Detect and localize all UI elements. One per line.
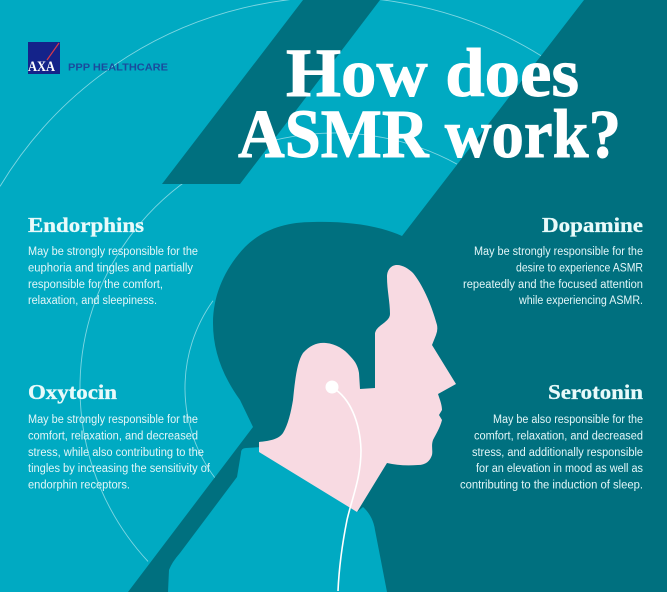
- panel: dopamine: May be strongly responsible for the: [474, 246, 643, 258]
- logo: AXA: [28, 59, 55, 75]
- panel: serotonin: May be also responsible for the: [493, 414, 643, 426]
- title: How does: [286, 35, 579, 111]
- panel: oxytocin: Oxytocin: [28, 380, 117, 404]
- panel: serotonin: for an elevation in mood as well as: [476, 463, 643, 475]
- panel: serotonin: stress, and additionally responsible: [472, 447, 643, 459]
- panel: endorphins: relaxation, and sleepiness.: [28, 295, 157, 307]
- body: [168, 447, 387, 592]
- earphone: [326, 380, 361, 591]
- panel: serotonin: [460, 380, 643, 492]
- panel: oxytocin: stress, while also contributing to the: [28, 447, 204, 459]
- panel: endorphins: euphoria and tingles and partially: [28, 262, 193, 274]
- panel: dopamine: Dopamine: [542, 213, 643, 237]
- logo: [28, 42, 168, 75]
- logo: PPP HEALTHCARE: [68, 62, 168, 74]
- panel: endorphins: responsible for the comfort,: [28, 279, 163, 291]
- panel: endorphins: [28, 213, 198, 307]
- panel: endorphins: Endorphins: [28, 213, 144, 237]
- panel: oxytocin: comfort, relaxation, and decreased: [28, 430, 198, 442]
- panel: dopamine: while experiencing ASMR.: [518, 295, 643, 307]
- panel: dopamine: [463, 213, 643, 307]
- panel: dopamine: repeatedly and the focused attention: [463, 279, 643, 291]
- panel: oxytocin: endorphin receptors.: [28, 480, 130, 492]
- panel: serotonin: Serotonin: [548, 380, 643, 404]
- title: ASMR work?: [238, 96, 621, 172]
- panel: oxytocin: tingles by increasing the sensitivity of: [28, 463, 211, 475]
- panel: serotonin: contributing to the induction of sleep.: [460, 480, 643, 492]
- panel: endorphins: May be strongly responsible for the: [28, 246, 198, 258]
- panel: serotonin: comfort, relaxation, and decreased: [474, 430, 643, 442]
- panel: oxytocin: May be strongly responsible for the: [28, 414, 198, 426]
- face and neck: [259, 265, 456, 512]
- diagonal stripe: [162, 0, 380, 184]
- panel: dopamine: desire to experience ASMR: [516, 262, 643, 274]
- title: [238, 35, 621, 172]
- panel: oxytocin: [28, 380, 211, 492]
